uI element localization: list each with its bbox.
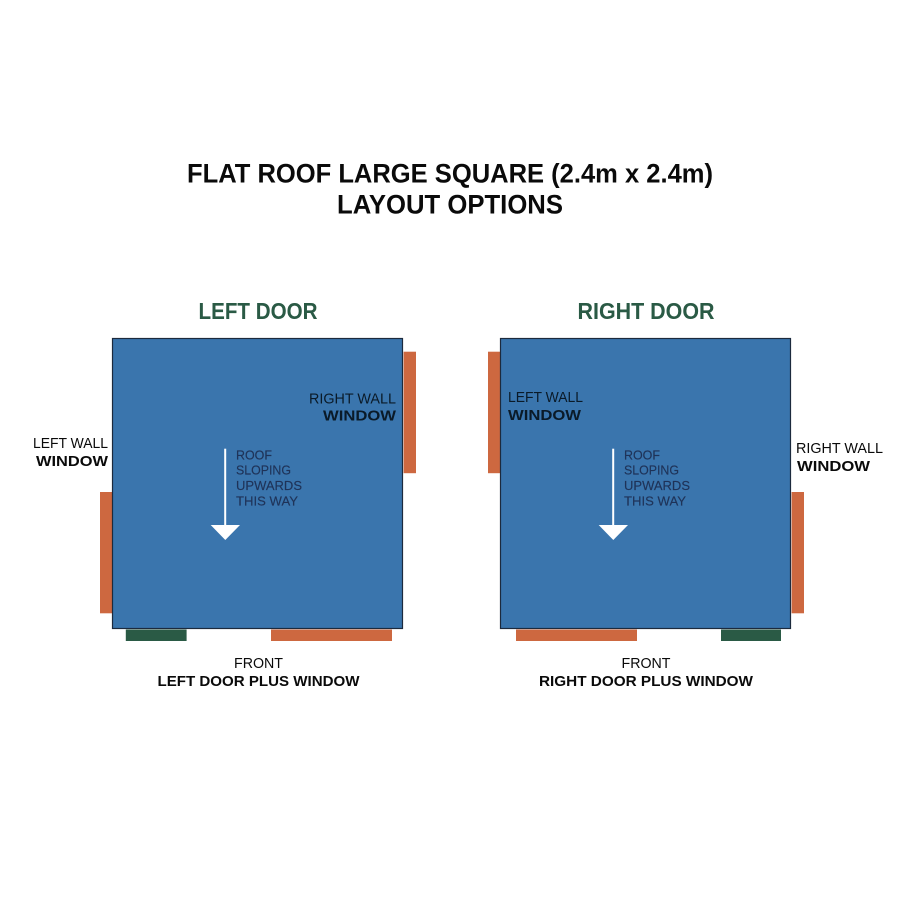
- roof slope note: THIS WAY: [624, 494, 686, 508]
- right wall label: RIGHT WALL: [309, 390, 396, 407]
- right wall label: WINDOW: [797, 458, 871, 475]
- front label: FRONT: [234, 655, 283, 672]
- front label: FRONT: [622, 655, 670, 672]
- front label: [539, 655, 754, 690]
- panel: left door: [33, 298, 416, 690]
- roof square: [500, 338, 790, 628]
- roof slope note: [236, 447, 302, 508]
- title: [187, 158, 713, 219]
- title: FLAT ROOF LARGE SQUARE (2.4m x 2.4m): [187, 158, 713, 188]
- roof slope note: UPWARDS: [236, 478, 302, 493]
- front label: [158, 655, 360, 690]
- front window bar: [271, 630, 392, 641]
- roof slope note: SLOPING: [624, 463, 679, 478]
- right wall label: [796, 440, 883, 475]
- front label: RIGHT DOOR PLUS WINDOW: [539, 673, 754, 690]
- left wall label: LEFT WALL: [33, 435, 108, 452]
- roof slope note: [624, 447, 690, 508]
- front label: LEFT DOOR PLUS WINDOW: [158, 673, 360, 690]
- left wall label: [33, 435, 109, 470]
- roof square: [112, 338, 402, 628]
- roof slope note: THIS WAY: [236, 494, 298, 508]
- title: LAYOUT OPTIONS: [337, 189, 563, 219]
- right wall window bar: [792, 492, 804, 613]
- left wall label: WINDOW: [508, 407, 582, 424]
- right wall label: WINDOW: [323, 408, 397, 425]
- heading: right door: RIGHT DOOR: [578, 298, 715, 324]
- roof slope note: SLOPING: [236, 463, 291, 478]
- left wall label: WINDOW: [36, 453, 109, 470]
- arrow: roof slope: [599, 449, 628, 540]
- panel: right door: [488, 298, 883, 690]
- roof slope note: UPWARDS: [624, 478, 690, 493]
- arrow: roof slope: [211, 449, 240, 540]
- front door bar: [126, 630, 187, 641]
- left wall window bar: [100, 492, 112, 613]
- left wall label: LEFT WALL: [508, 389, 583, 406]
- roof slope note: ROOF: [624, 447, 660, 462]
- right wall label: [309, 390, 397, 425]
- left wall window bar: [488, 352, 500, 473]
- right wall label: RIGHT WALL: [796, 440, 883, 457]
- right wall window bar: [404, 352, 416, 473]
- roof slope note: ROOF: [236, 447, 272, 462]
- front window bar: [516, 630, 637, 641]
- heading: left door: LEFT DOOR: [198, 298, 318, 324]
- front door bar: [721, 630, 781, 641]
- left wall label: [508, 389, 583, 424]
